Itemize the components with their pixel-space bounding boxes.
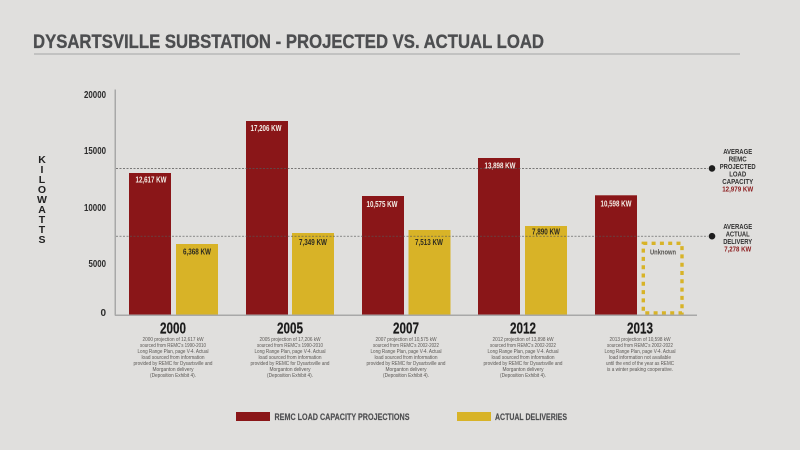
bars: 2005 — [246, 121, 334, 315]
y axis label: I — [41, 164, 44, 176]
year note: 2012: 2012 projection of 13,898 kW — [492, 337, 554, 343]
year note: 2000: 2000 projection of 12,617 kW — [142, 337, 204, 343]
y axis label: K — [38, 154, 46, 166]
year note: 2012 — [484, 320, 562, 379]
year note: 2005 — [250, 320, 330, 379]
callout: average actual delivery: ACTUAL — [726, 230, 750, 238]
y axis ticks: 5000 — [88, 259, 106, 270]
year note: 2007: Long Range Plan, page V-4. Actual — [370, 349, 442, 355]
year note: 2007 — [366, 320, 446, 379]
y axis label: W — [37, 194, 47, 206]
callout: average actual delivery — [723, 222, 752, 254]
chart axes — [114, 90, 697, 316]
bars: 2007: 7,513 KW — [415, 237, 443, 247]
year note: 2012: Morganton delivery — [502, 367, 544, 373]
year note: 2000 — [134, 320, 212, 379]
bars: 2005: 7,349 KW — [299, 237, 327, 247]
year note: 2000: 2000 — [160, 320, 186, 337]
average delivery line — [116, 233, 715, 240]
y axis label: L — [39, 174, 46, 186]
year note: 2013: sourced from REMC's 2002-2022 — [607, 343, 673, 349]
year note: 2013 — [604, 320, 676, 373]
year note: 2012: provided by REMC for Dysartsville and — [484, 361, 562, 367]
callout: average actual delivery: AVERAGE — [723, 222, 752, 231]
year note: 2000: Morganton delivery — [152, 367, 194, 373]
year note: 2007: provided by REMC for Dysartsville and — [366, 361, 446, 367]
year note: 2007: load sourced from information — [374, 355, 438, 361]
year note: 2005: load sourced from information — [258, 355, 322, 361]
legend: actual deliveries — [457, 412, 567, 423]
year note: 2000: provided by REMC for Dysartsville and — [134, 361, 212, 367]
y axis label: T — [39, 224, 46, 236]
year note: 2000: load sourced from information — [142, 355, 204, 361]
legend: actual deliveries: ACTUAL DELIVERIES — [495, 412, 567, 423]
year note: 2013: Long Range Plan, page V-4. Actual — [604, 349, 676, 355]
year note: 2012: 2012 — [510, 320, 536, 337]
callout: average projected load capacity — [720, 147, 756, 194]
y axis ticks: 0 — [100, 308, 106, 319]
bars: 2012: 13,898 KW — [484, 160, 516, 170]
bars: 2013 — [595, 195, 682, 315]
year note: 2000: (Deposition Exhibit 4). — [150, 373, 196, 379]
bars: 2000: 6,368 KW — [183, 246, 211, 256]
bars: 2000: 12,617 KW — [136, 174, 167, 184]
year note: 2005: 2005 — [277, 320, 303, 337]
bars: 2000 — [129, 173, 218, 315]
year note: 2012: sourced from REMC's 2002-2022 — [490, 343, 556, 349]
callout: average projected load capacity: LOAD — [729, 170, 746, 178]
year note: 2013: 2013 — [627, 320, 653, 337]
y axis ticks: 10000 — [84, 203, 106, 214]
year note: 2007: (Deposition Exhibit 4). — [383, 373, 429, 379]
year note: 2005: (Deposition Exhibit 4). — [267, 373, 313, 379]
year note: 2005: Morganton delivery — [270, 367, 311, 373]
y axis label: O — [38, 184, 46, 196]
year note: 2000: Long Range Plan, page V-4. Actual — [138, 349, 208, 355]
bars: 2013: Unknown — [650, 248, 676, 256]
year note: 2013: load information not available — [609, 355, 671, 361]
year note: 2012: Long Range Plan, page V-4. Actual — [488, 349, 558, 355]
year note: 2005: 2005 projection of 17,206 kW — [260, 337, 321, 343]
year note: 2005: provided by REMC for Dysartsville and — [250, 361, 330, 367]
bars: 2012 — [478, 158, 567, 315]
year note: 2012: load sourced from information — [492, 355, 554, 361]
year note: 2005: sourced from REMC's 1990-2010 — [257, 343, 323, 349]
legend: REMC load capacity projections — [236, 412, 410, 423]
year note: 2007: Morganton delivery — [386, 367, 427, 373]
title: DYSARTSVILLE SUBSTATION - PROJECTED VS. ACTUAL LOAD — [33, 31, 544, 53]
year note: 2013: 2013 projection of 10,598 kW — [610, 337, 671, 343]
year note: 2000: sourced from REMC's 1990-2010 — [140, 343, 206, 349]
callout: average actual delivery: 7,278 KW — [724, 244, 751, 254]
y axis ticks: 20000 — [84, 90, 106, 101]
year note: 2007: 2007 — [393, 320, 419, 337]
callout: average projected load capacity: AVERAGE — [723, 147, 752, 156]
average projected line — [116, 165, 715, 172]
bars: 2012: 7,890 KW — [532, 226, 560, 236]
y axis label: A — [38, 204, 46, 216]
callout: average projected load capacity: REMC — [729, 154, 747, 164]
year note: 2005: Long Range Plan, page V-4. Actual — [254, 349, 326, 355]
callout: average projected load capacity: PROJECTED — [720, 162, 756, 171]
callout: average projected load capacity: CAPACITY — [722, 177, 753, 186]
y axis ticks — [84, 90, 106, 319]
callout: average actual delivery: DELIVERY — [723, 237, 752, 246]
y axis label: S — [38, 234, 46, 246]
bars: 2007 — [362, 196, 450, 315]
bars: 2013: 10,598 KW — [600, 199, 632, 209]
year note: 2007: 2007 projection of 10,575 kW — [376, 337, 437, 343]
bars: 2007: 10,575 KW — [366, 199, 398, 209]
year note: 2007: sourced from REMC's 2002-2022 — [373, 343, 439, 349]
legend: REMC load capacity projections: REMC LOAD CAPACITY PROJECTIONS — [274, 412, 410, 423]
year note: 2012: (Deposition Exhibit 4). — [500, 373, 546, 379]
year note: 2013: until the end of the year as REMC — [606, 361, 674, 367]
y axis label: T — [39, 214, 46, 226]
y axis label — [37, 154, 47, 246]
callout: average projected load capacity: 12,979 KW — [722, 184, 753, 194]
year note: 2013: is a winter peaking cooperative. — [607, 367, 673, 373]
bars: 2005: 17,206 KW — [250, 123, 282, 133]
y axis ticks: 15000 — [84, 146, 106, 157]
